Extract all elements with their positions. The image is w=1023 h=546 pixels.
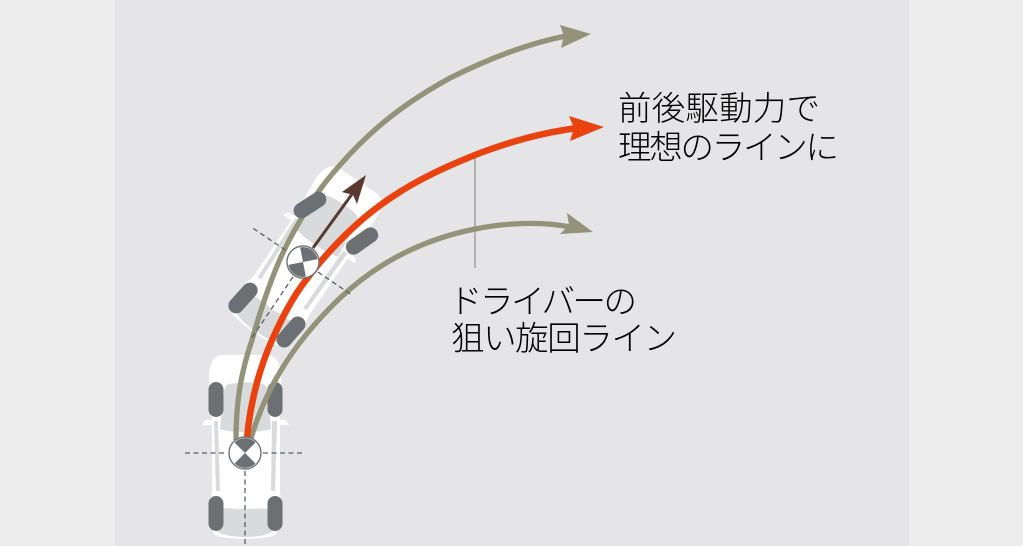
label: driver's intended turning line: [449, 284, 677, 358]
marker: turned centre of gravity: [281, 240, 325, 284]
wheels: initial car: [208, 382, 282, 531]
arrow: vehicle direction: [313, 175, 366, 248]
label: ideal line with front and rear drive force: [618, 91, 839, 167]
marker: initial centre of gravity: [229, 437, 261, 469]
label: driver's intended turning line: ドライバーの: [449, 284, 637, 321]
axes: initial car centre lines: [185, 453, 305, 546]
curve: upper olive line with arrow: [236, 25, 591, 440]
wheels: turned car, front wheels steered: [225, 189, 381, 351]
label: driver's intended turning line: 狙い旋回ライン: [451, 321, 677, 358]
label: ideal line with front and rear drive force: 理想のラインに: [618, 130, 839, 167]
curve: orange ideal line with arrow: [247, 116, 604, 438]
leader line: driver's intended line: [474, 154, 476, 268]
car: turned position: [219, 157, 394, 358]
curve: lower olive line with arrow: [251, 213, 593, 438]
car: initial position: [202, 355, 289, 539]
label: ideal line with front and rear drive force: 前後駆動力で: [618, 91, 820, 128]
axes: turned car centre lines: [201, 228, 353, 373]
panel: background: [115, 0, 909, 546]
